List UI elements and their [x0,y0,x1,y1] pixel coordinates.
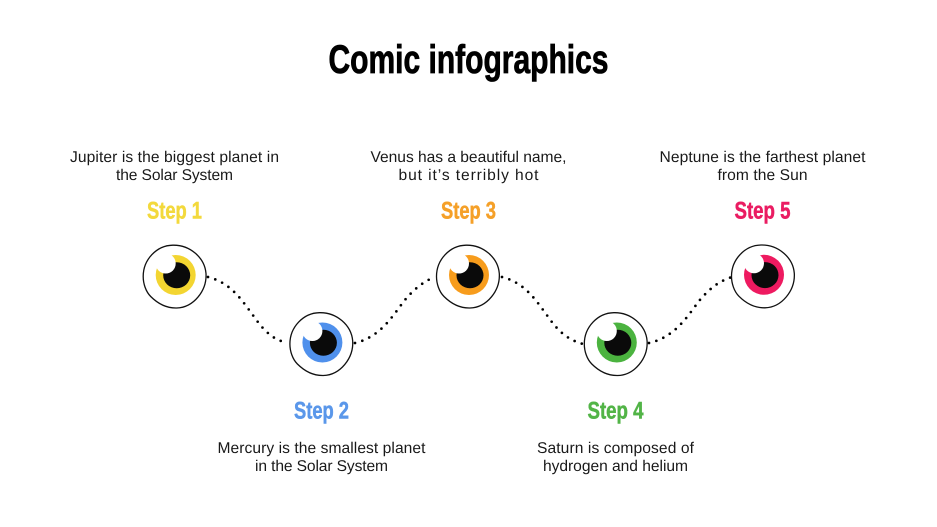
step 2 [218,313,426,475]
step 4 description: hydrogen and helium [543,458,688,475]
step 3 description: Venus has a beautiful name, [370,149,566,166]
step 1 [70,149,279,308]
icon: yellow eye [143,245,206,308]
connector: step 1 to step 2 [208,277,285,342]
step 1 heading: Step 1 [147,198,202,224]
step 5 heading: Step 5 [734,198,790,224]
step 3 [370,149,566,308]
step 5 description: Neptune is the farthest planet [660,149,866,166]
icon: orange eye [436,245,499,308]
step 2 heading: Step 2 [294,398,349,424]
step 1 description: Jupiter is the biggest planet in [70,149,279,166]
step 2 description: in the Solar System [255,458,388,475]
step 1 description: the Solar System [116,167,233,184]
step 3 description: but it’s terribly hot [398,167,539,184]
step 4 heading: Step 4 [588,398,644,424]
icon: pink eye [732,245,794,308]
connector: step 3 to step 4 [502,277,583,344]
step 4 description: Saturn is composed of [537,440,695,457]
connector: step 2 to step 3 [355,277,435,343]
step 5 [660,149,866,308]
step 3 heading: Step 3 [441,198,496,224]
icon: blue eye [290,313,353,376]
title: Comic infographics [328,38,608,82]
step 2 description: Mercury is the smallest planet [218,440,426,457]
step 4 [537,313,695,475]
connector: step 4 to step 5 [649,277,732,343]
icon: green eye [584,313,647,376]
step 5 description: from the Sun [718,167,808,184]
